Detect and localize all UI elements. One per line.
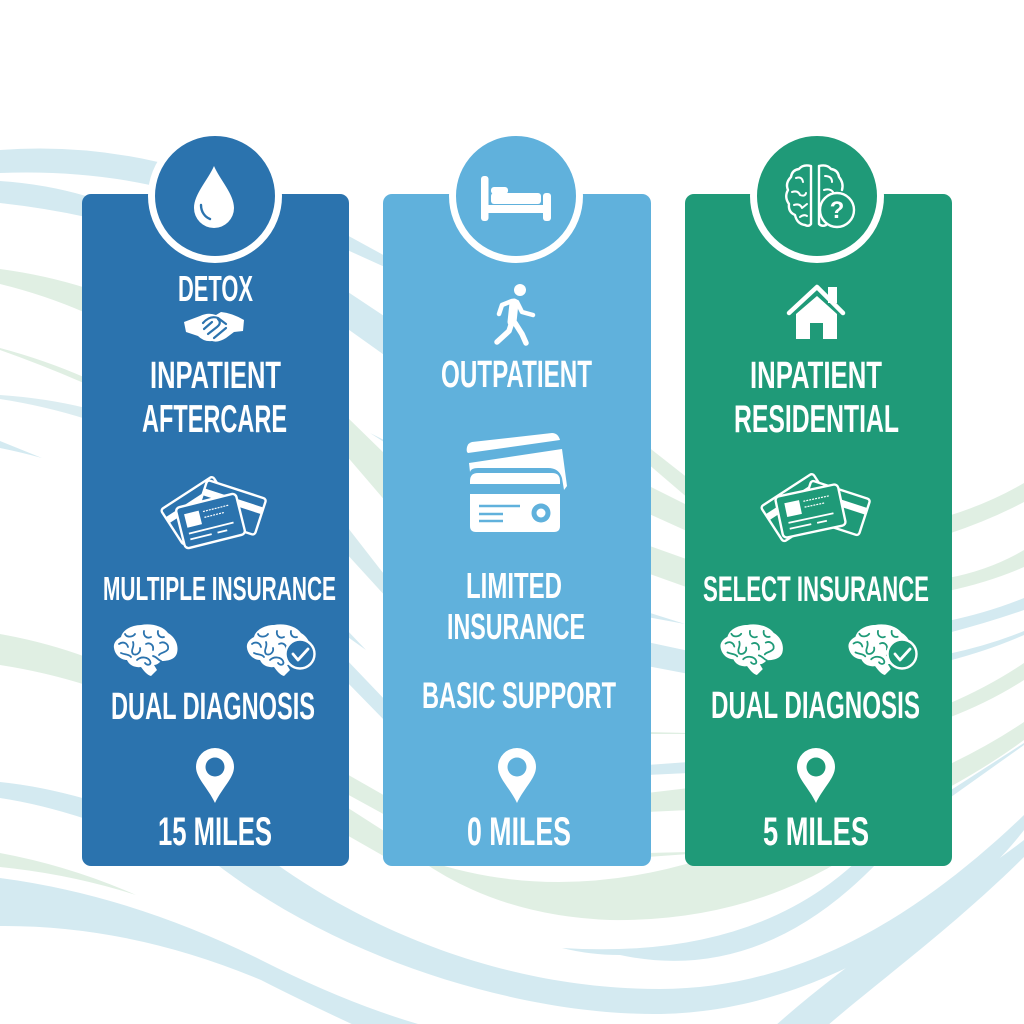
icon: brain xyxy=(720,624,783,675)
label: limited insurance: INSURANCE xyxy=(447,606,585,647)
heading: detox: DETOX xyxy=(178,268,253,309)
icon: brain with check xyxy=(848,624,916,675)
label: 0 miles: 0 MILES xyxy=(467,810,571,854)
heading: inpatient aftercare xyxy=(142,355,287,441)
label: 5 miles: 5 MILES xyxy=(763,810,869,854)
icon: location pin xyxy=(196,748,234,803)
icon: credit cards xyxy=(467,433,567,532)
icon: location pin xyxy=(797,748,835,803)
panel: inpatient residential xyxy=(685,132,952,866)
icon: walking person xyxy=(497,284,533,343)
icon: brain xyxy=(114,624,178,676)
heading: inpatient residential: RESIDENTIAL xyxy=(734,398,899,441)
icon: insurance cards xyxy=(761,473,870,542)
label: limited insurance xyxy=(447,565,585,647)
heading: inpatient aftercare: AFTERCARE xyxy=(142,398,287,441)
icon: insurance cards xyxy=(161,476,266,549)
heading: outpatient: OUTPATIENT xyxy=(441,354,592,396)
heading: inpatient residential: INPATIENT xyxy=(750,355,882,397)
icon: brain with question mark: ? xyxy=(830,197,844,224)
heading: inpatient aftercare: INPATIENT xyxy=(150,355,281,397)
icon: brain with question mark xyxy=(786,165,854,227)
icon: bed xyxy=(481,176,551,221)
label: multiple insurance: MULTIPLE INSURANCE xyxy=(103,571,336,608)
label: dual diagnosis: DUAL DIAGNOSIS xyxy=(111,686,315,728)
icon: handshake xyxy=(184,312,244,342)
icon: water drop xyxy=(194,166,234,228)
icon: brain with check xyxy=(247,624,314,676)
panel: detox inpatient aftercare xyxy=(82,132,349,866)
icon: location pin xyxy=(498,748,536,803)
heading: inpatient residential xyxy=(734,355,899,441)
label: basic support: BASIC SUPPORT xyxy=(422,675,616,716)
icon: house xyxy=(789,287,843,339)
label: 15 miles: 15 MILES xyxy=(158,810,272,854)
label: limited insurance: LIMITED xyxy=(466,565,562,606)
panel: outpatient xyxy=(383,132,651,866)
